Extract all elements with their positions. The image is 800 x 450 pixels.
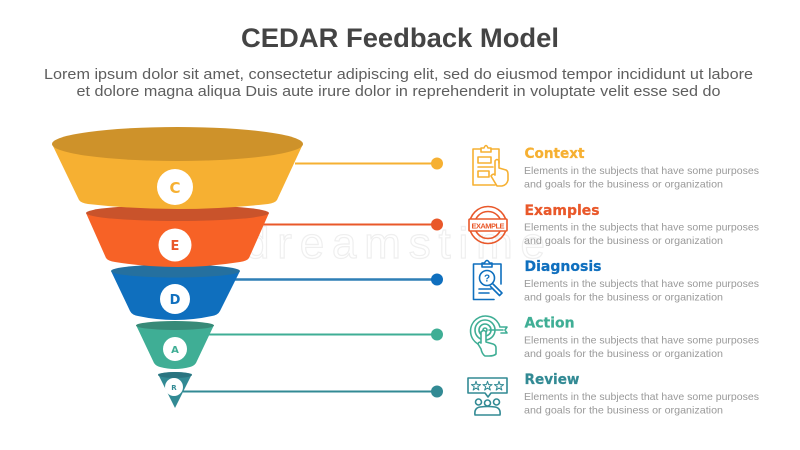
text block: context: and goals for the business or organization <box>524 180 723 190</box>
icon: example stamp: EXAMPLE <box>472 221 504 230</box>
text block: examples: and goals for the business or organization <box>524 236 723 247</box>
icon: context clipboard with hand <box>473 146 508 186</box>
text block: diagnosis <box>524 259 759 304</box>
icon: example stamp <box>469 206 507 244</box>
connector: examples <box>262 218 443 230</box>
text block: review: and goals for the business or organization <box>524 406 723 416</box>
text block: review: Elements in the subjects that have some purposes <box>524 392 759 403</box>
funnel tier: D: D <box>170 293 181 308</box>
text block: examples <box>524 203 759 247</box>
funnel tier: D <box>111 264 240 320</box>
text block: action: and goals for the business or organization <box>524 349 723 360</box>
funnel <box>52 127 303 408</box>
text block: examples: Examples <box>524 203 600 219</box>
icon: review stars and people: ★ <box>482 379 493 393</box>
funnel tier: E <box>86 205 269 267</box>
connector: diagnosis <box>234 274 443 286</box>
connector: context <box>295 158 443 170</box>
funnel tier: R: R <box>171 384 177 392</box>
text block: diagnosis: Elements in the subjects that have some purposes <box>524 279 759 290</box>
text: dreamstime <box>245 219 545 268</box>
icon: review stars and people <box>468 378 507 415</box>
text block: diagnosis: and goals for the business or organization <box>524 292 723 304</box>
connector lines <box>183 158 443 398</box>
connector: action <box>208 328 443 340</box>
funnel tier: A <box>136 321 214 369</box>
icon: review stars and people: ★ <box>471 379 481 393</box>
icon: diagnosis clipboard with magnifier: ? <box>484 274 490 284</box>
icon: diagnosis clipboard with magnifier <box>474 260 502 300</box>
funnel tier: R <box>158 372 192 408</box>
funnel tier: E: E <box>171 239 179 254</box>
text block: context <box>524 146 759 190</box>
subtitle <box>44 66 753 100</box>
text block: action: Elements in the subjects that have some purposes <box>524 336 759 346</box>
subtitle: Lorem ipsum dolor sit amet, consectetur adipiscing elit, sed do eiusmod tempor incididunt ut labore <box>44 66 753 83</box>
connector: review <box>183 386 443 398</box>
funnel tier: C: C <box>169 179 181 197</box>
title: CEDAR Feedback Model <box>241 23 559 53</box>
icon: action target with finger <box>471 316 507 356</box>
text block: examples: Elements in the subjects that have some purposes <box>524 222 759 234</box>
text block: review: Review <box>524 372 580 388</box>
text block: context: Elements in the subjects that have some purposes <box>524 166 759 177</box>
text block: action <box>524 316 759 360</box>
text block: diagnosis: Diagnosis <box>524 259 602 275</box>
subtitle: et dolore magna aliqua Duis aute irure dolor in reprehenderit in voluptate velit esse sed do <box>76 83 720 100</box>
funnel tier: A: A <box>171 345 179 356</box>
text block: action: Action <box>524 316 574 332</box>
icon: review stars and people: ★ <box>494 379 504 393</box>
text block: review <box>524 372 759 416</box>
text block: context: Context <box>524 146 585 162</box>
funnel tier: C <box>52 127 303 209</box>
